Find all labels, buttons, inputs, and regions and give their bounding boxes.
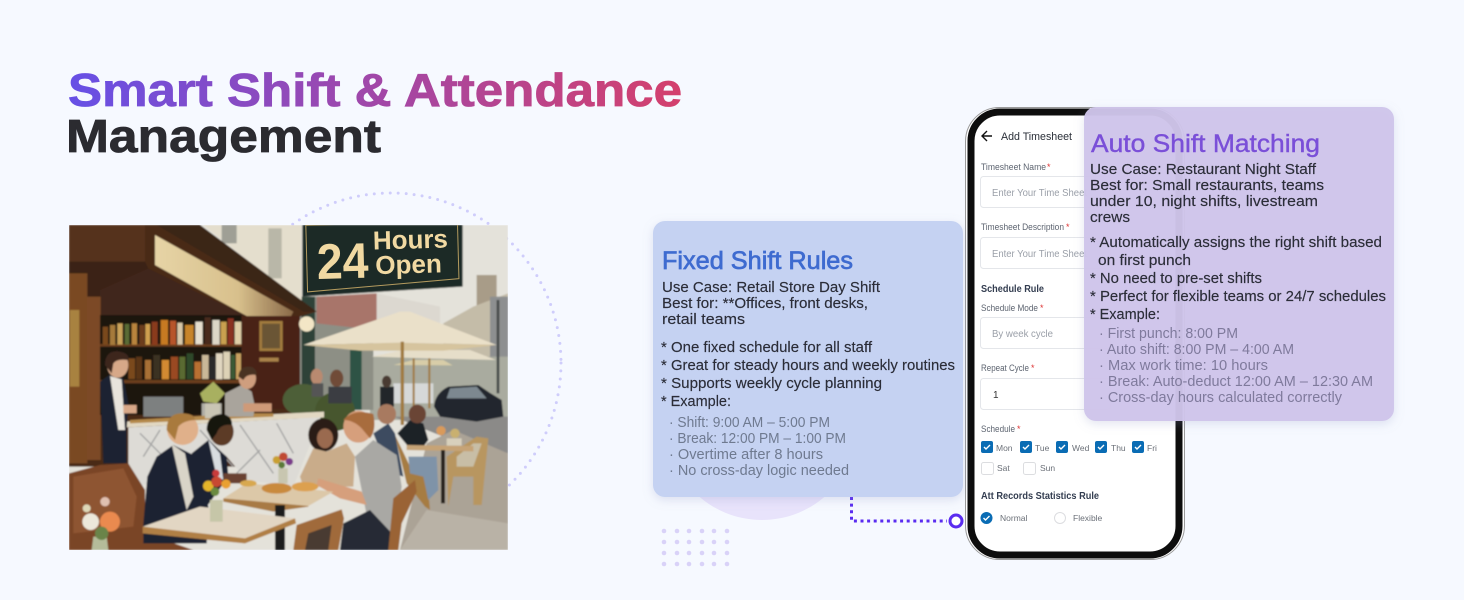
phone screen header: Add Timesheet	[1001, 131, 1072, 143]
form: timesheet fields: Timesheet Description	[981, 222, 1064, 232]
phone body	[966, 108, 1184, 560]
form: schedule rule: *	[1031, 363, 1035, 373]
feature bullets: on first punch	[1098, 253, 1191, 269]
sign text	[306, 221, 459, 292]
example details: · Auto shift: 8:00 PM – 4:00 AM	[1099, 342, 1294, 358]
form: att records statistics rule: Normal	[1000, 513, 1028, 523]
form: schedule rule: Schedule Rule	[981, 284, 1044, 295]
sign text: 24	[316, 233, 369, 290]
feature bullets: * Automatically assigns the right shift based	[1090, 235, 1382, 251]
card heading: Fixed Shift Rules	[662, 247, 853, 275]
use case text: Best for: Small restaurants, teams	[1090, 178, 1324, 194]
use case text: Best for: **Offices, front desks,	[662, 296, 868, 312]
use case text: Use Case: Restaurant Night Staff	[1090, 162, 1317, 178]
example details: · No cross-day logic needed	[669, 463, 849, 479]
feature bullets: * One fixed schedule for all staff	[661, 340, 873, 356]
use case text	[662, 280, 880, 328]
form: timesheet fields: Timesheet Name	[981, 162, 1046, 172]
feature bullets: * Example:	[1090, 307, 1160, 323]
form: timesheet fields: Enter Your Time Sheet	[992, 188, 1087, 199]
feature bullets	[661, 340, 955, 410]
decorative dotted circle	[221, 193, 561, 533]
form: schedule rule: 1	[993, 390, 999, 401]
form: timesheet fields: *	[1066, 222, 1070, 232]
feature bullets: * Supports weekly cycle planning	[661, 376, 882, 392]
form: schedule day checkboxes: Mon	[996, 443, 1013, 453]
form: schedule day checkboxes: Schedule	[981, 424, 1015, 434]
form: schedule day checkboxes	[981, 424, 1157, 474]
example details: · Max work time: 10 hours	[1099, 358, 1268, 374]
decorative dot grid	[662, 529, 729, 566]
form: schedule rule: By week cycle	[992, 329, 1053, 340]
feature bullets: * Great for steady hours and weekly routines	[661, 358, 955, 374]
use case text: crews	[1090, 210, 1130, 226]
title: Smart Shift & Attendance	[68, 64, 682, 116]
use case text: retail teams	[662, 312, 745, 328]
phone mockup	[966, 108, 1184, 560]
title	[66, 64, 682, 162]
example details: · Overtime after 8 hours	[669, 447, 823, 463]
form: schedule day checkboxes: Fri	[1147, 443, 1157, 453]
phone bezel	[971, 112, 1179, 555]
form: schedule day checkboxes: *	[1017, 424, 1021, 434]
feature bullets: * No need to pre-set shifts	[1090, 271, 1262, 287]
photo: restaurant with 24 hours open sign	[69, 221, 508, 550]
form: schedule day checkboxes: Sun	[1040, 463, 1055, 473]
form: schedule rule: Repeat Cycle	[981, 363, 1029, 373]
example details: · Break: 12:00 PM – 1:00 PM	[669, 431, 846, 447]
example details: · Shift: 9:00 AM – 5:00 PM	[669, 415, 830, 431]
form: schedule day checkboxes: Wed	[1072, 443, 1090, 453]
form: timesheet fields: Enter Your Time Sheet	[992, 249, 1087, 260]
feature bullets: * Example:	[661, 394, 731, 410]
form: schedule rule: Schedule Mode	[981, 303, 1038, 313]
panel: auto shift matching	[1084, 107, 1394, 421]
connector: dotted line to phone	[852, 497, 962, 527]
feature bullets	[1090, 235, 1386, 323]
card heading: Auto Shift Matching	[1091, 130, 1320, 158]
feature bullets: * Perfect for flexible teams or 24/7 schedules	[1090, 289, 1386, 305]
form: schedule day checkboxes: Tue	[1035, 443, 1050, 453]
form: att records statistics rule	[980, 491, 1103, 524]
form: att records statistics rule: Flexible	[1073, 513, 1103, 523]
sign text: Hours	[373, 224, 448, 256]
title: Management	[66, 110, 381, 162]
use case text	[1090, 162, 1324, 226]
form: schedule rule	[980, 284, 1110, 410]
form: timesheet fields	[980, 162, 1110, 268]
form: schedule rule: *	[1040, 303, 1044, 313]
use case text: Use Case: Retail Store Day Shift	[662, 280, 880, 296]
form: schedule day checkboxes: Thu	[1111, 443, 1126, 453]
example details	[1099, 326, 1373, 406]
example details	[669, 415, 849, 479]
example details: · First punch: 8:00 PM	[1099, 326, 1238, 342]
example details: · Break: Auto-deduct 12:00 AM – 12:30 AM	[1099, 374, 1373, 390]
form: att records statistics rule: Att Records Statistics Rule	[981, 491, 1099, 502]
panel: fixed shift rules	[653, 221, 963, 497]
sign text: Open	[375, 248, 442, 280]
form: timesheet fields: *	[1047, 162, 1051, 172]
use case text: under 10, night shifts, livestream	[1090, 194, 1318, 210]
example details: · Cross-day hours calculated correctly	[1099, 390, 1343, 406]
decorative circle behind fixed shift card	[666, 328, 858, 520]
form: schedule day checkboxes: Sat	[997, 463, 1010, 473]
